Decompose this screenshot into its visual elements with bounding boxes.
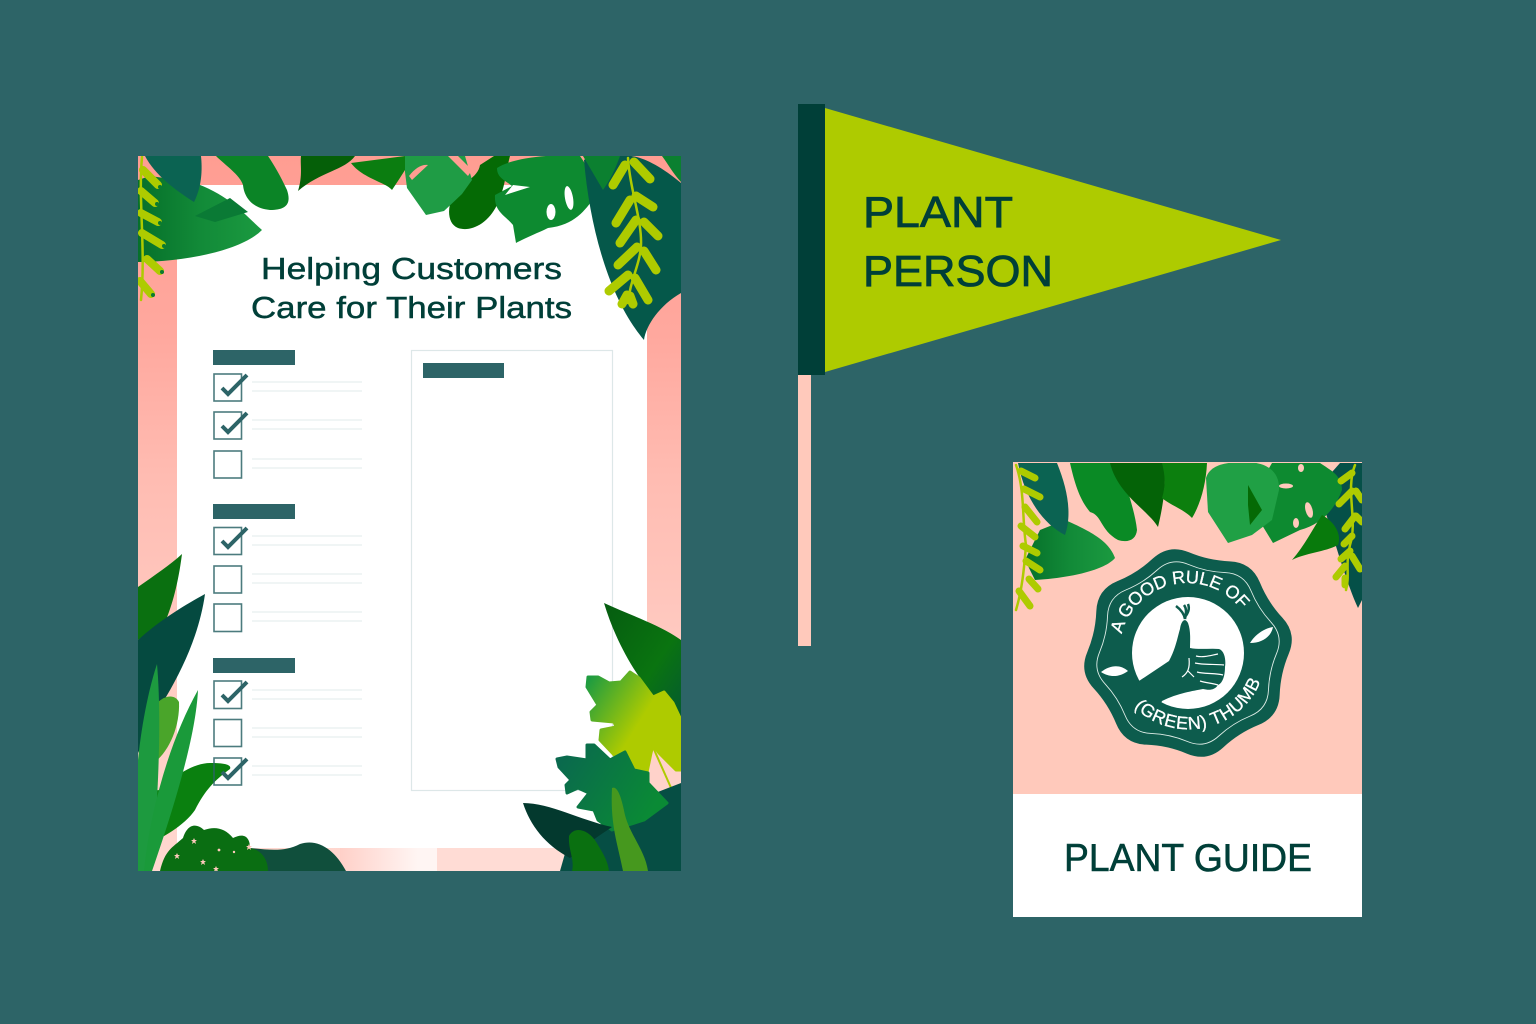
leaf: dark green	[298, 156, 355, 191]
flag stick	[798, 375, 811, 646]
leaf: top dark green	[604, 603, 681, 720]
leaf: teal maple	[557, 745, 667, 830]
panel: plant person pennant	[798, 104, 1281, 646]
checklist group one	[213, 350, 362, 478]
leaf: blade two	[151, 690, 198, 871]
panel: plant guide booklet	[1013, 462, 1362, 917]
leaf: top left large green	[138, 176, 262, 262]
dark blob	[250, 842, 346, 871]
pennant text	[863, 188, 1053, 296]
checklist group two	[213, 504, 362, 632]
leaf: mid green	[351, 156, 405, 190]
leaf: green round	[569, 830, 609, 871]
vine dots left	[151, 185, 166, 297]
poster title: Helping Customers	[261, 251, 562, 286]
leaf: teal	[1018, 463, 1068, 535]
leaf: lime blob	[158, 696, 180, 759]
booklet cover	[1013, 462, 1362, 794]
leaf: dark teal spear	[138, 594, 205, 753]
leaf: wavy green	[1070, 463, 1137, 541]
leaf: monstera left	[1206, 462, 1279, 543]
poster pink border	[138, 156, 681, 871]
leaf: wavy green	[216, 156, 289, 210]
bottom left foliage	[138, 554, 346, 872]
icon: leaf right	[1250, 627, 1273, 643]
right notes box	[412, 350, 612, 790]
arc path top	[1122, 583, 1248, 634]
leaf: dark teal base	[560, 783, 681, 871]
leaf: near black spear	[523, 803, 612, 858]
leaf: blade one	[138, 664, 159, 871]
leaf: broad green	[157, 763, 230, 836]
vine: left	[1016, 465, 1040, 610]
icon: thumbs up hand	[1136, 604, 1225, 711]
leaf: green large	[1025, 520, 1115, 580]
leaf: lime maple	[587, 672, 681, 777]
leaf: monstera dark	[495, 155, 594, 243]
monstera holes	[1279, 464, 1314, 528]
leaf: top left teal	[145, 156, 202, 202]
badge text bottom: (GREEN) THUMB	[1134, 678, 1260, 732]
leaf: monstera right	[1262, 463, 1342, 543]
poster title	[251, 251, 572, 325]
leaf: olive blade	[612, 788, 648, 871]
checklist group three	[213, 658, 362, 785]
pennant	[825, 108, 1281, 372]
top foliage	[138, 155, 681, 340]
leaf: top right dark teal	[584, 156, 681, 340]
poster title: Care for Their Plants	[251, 290, 572, 325]
leaf: dark teal right	[1318, 463, 1362, 608]
pennant text: PERSON	[863, 247, 1053, 296]
bush with stars	[160, 826, 268, 872]
vine: top right	[609, 158, 658, 304]
badge white disc	[1132, 597, 1244, 709]
leaf: dark curl	[449, 156, 510, 229]
leaf: green spear	[1292, 515, 1339, 560]
panel: care checklist poster	[138, 155, 681, 872]
pennant text: PLANT	[863, 188, 1013, 237]
badge text top: A GOOD RULE OF	[1111, 570, 1250, 634]
booklet foliage	[1016, 462, 1362, 610]
leaf: dark	[1110, 463, 1165, 527]
vine: top left	[140, 157, 162, 300]
flag sleeve	[798, 104, 825, 375]
badge seal	[1067, 532, 1309, 774]
leaf: dark green spear	[138, 554, 182, 640]
bottom right foliage	[523, 603, 681, 871]
poster white sheet	[177, 185, 647, 848]
stem on maple	[653, 748, 672, 788]
badge inner line	[1081, 546, 1295, 760]
monstera holes	[505, 185, 575, 220]
vine: right	[1336, 465, 1362, 590]
arc path bottom	[1134, 675, 1263, 729]
booklet footer	[1013, 794, 1362, 917]
icon: leaf left	[1101, 666, 1128, 676]
leaf: mid green	[1162, 463, 1207, 518]
booklet title: PLANT GUIDE	[1064, 837, 1312, 880]
leaf: top right green	[583, 156, 620, 190]
leaf: monstera light	[405, 156, 472, 215]
badge: a good rule of green thumb	[1084, 549, 1292, 757]
